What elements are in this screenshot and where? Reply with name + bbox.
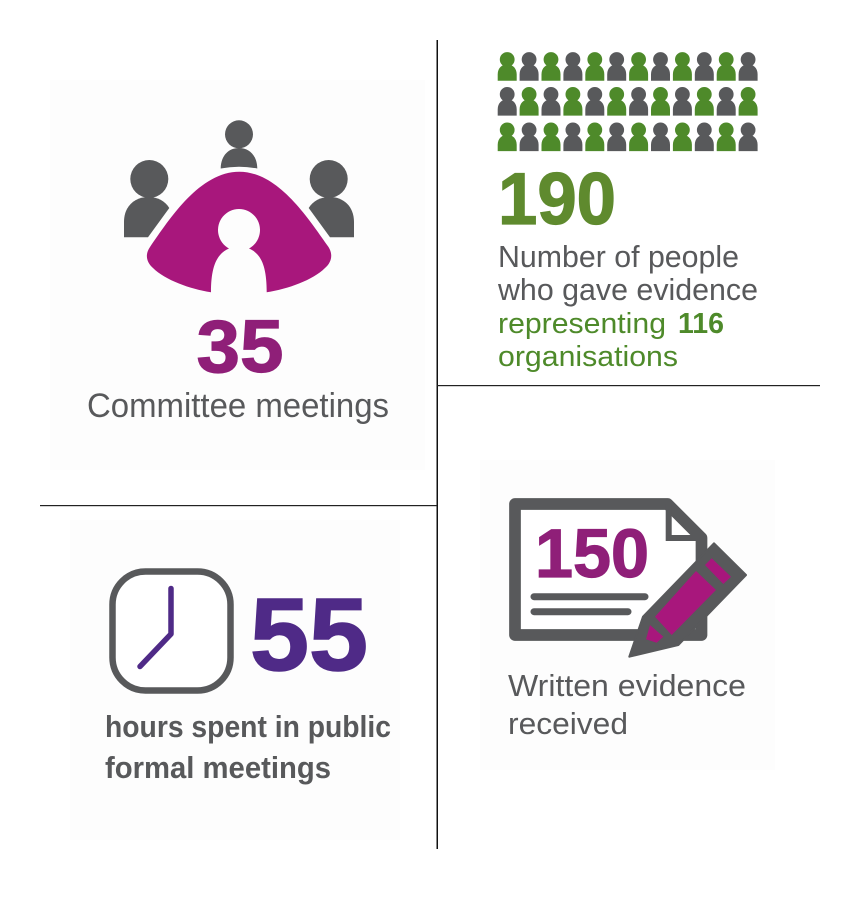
pictogram: rows of people [498, 52, 758, 151]
text: representing 116 organisations: 116 [678, 308, 724, 340]
label: committee meetings: Committee meetings [87, 387, 389, 425]
label: written evidence received: received [508, 706, 628, 741]
statistic: 190: 190 [498, 159, 616, 240]
icon: document with pencil [515, 504, 746, 657]
text: representing 116 organisations: organisations [498, 341, 678, 373]
panel: hours in public formal meetings [105, 572, 391, 785]
panel: written evidence [508, 504, 746, 741]
statistic: 35: 35 [196, 305, 284, 388]
panel: committee meetings [87, 120, 389, 425]
statistic: 55: 55 [250, 577, 368, 692]
icon: people around a table [124, 120, 354, 292]
label: written evidence received: Written evidence [508, 668, 746, 703]
text: hours spent in public formal meetings: formal meetings [105, 750, 331, 785]
statistic: 150: 150 [535, 515, 649, 592]
text: representing 116 organisations: representing [498, 308, 666, 340]
panel: people who gave evidence [497, 52, 758, 373]
text: number of people who gave evidence: who gave evidence [497, 272, 758, 307]
text: number of people who gave evidence: Number of people [498, 239, 739, 274]
text: hours spent in public formal meetings: hours spent in public [105, 709, 391, 744]
icon: clock [112, 572, 230, 690]
